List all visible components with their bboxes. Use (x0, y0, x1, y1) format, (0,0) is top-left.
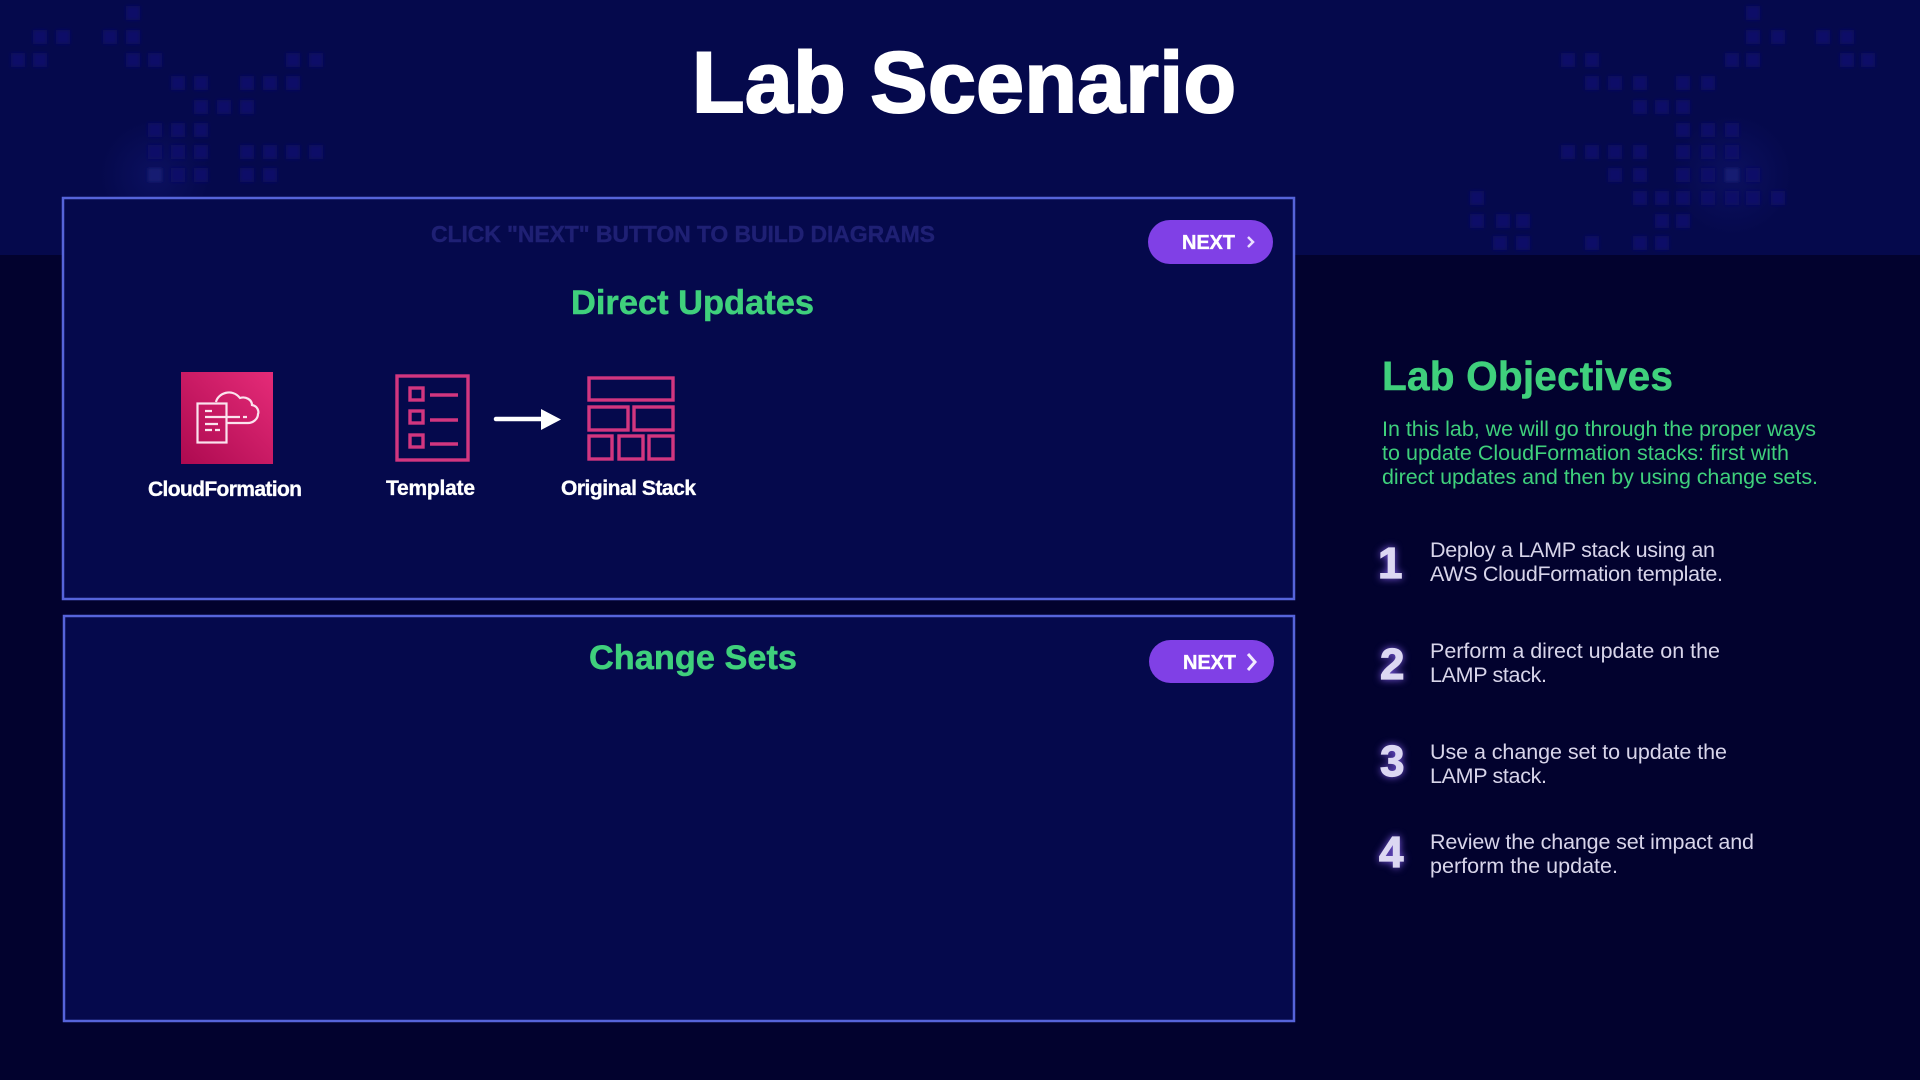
heading: lab objectives: Lab Objectives (1382, 353, 1673, 399)
objective 1: AWS CloudFormation template. (1430, 562, 1723, 586)
objective 4: Review the change set impact and (1430, 830, 1754, 854)
objective 3 (1380, 737, 1727, 788)
objective 2: 2 (1380, 640, 1404, 689)
heading: direct updates: Direct Updates (571, 284, 814, 322)
intro text: to update CloudFormation stacks: first with (1382, 441, 1789, 465)
instruction text: CLICK "NEXT" BUTTON TO BUILD DIAGRAMS (431, 221, 935, 247)
arrow (496, 409, 561, 430)
panel: change sets (64, 616, 1294, 1021)
panel: direct updates (63, 198, 1294, 599)
objective 3: LAMP stack. (1430, 764, 1547, 788)
objective 4: perform the update. (1430, 854, 1618, 878)
header band (0, 0, 1920, 255)
title: Lab Scenario (692, 35, 1236, 131)
objective 3: Use a change set to update the (1430, 740, 1727, 764)
label: cloudformation: CloudFormation (148, 478, 302, 501)
icon: template (397, 376, 468, 460)
icon: cloudformation (181, 372, 273, 464)
objective 1: 1 (1378, 539, 1402, 588)
objective 2: Perform a direct update on the (1430, 639, 1720, 663)
label: template: Template (386, 477, 475, 500)
panel: lab objectives (1378, 353, 1818, 878)
objective 4: 4 (1379, 828, 1404, 877)
objective 4 (1379, 828, 1754, 878)
objective 2 (1380, 639, 1720, 689)
heading: change sets: Change Sets (589, 639, 797, 677)
intro text (1382, 417, 1818, 489)
icon: original stack (589, 378, 673, 459)
objective 3: 3 (1380, 737, 1404, 786)
button: next: NEXT (1182, 232, 1235, 254)
button: next (1149, 640, 1274, 683)
objective 2: LAMP stack. (1430, 663, 1547, 687)
button: next (1148, 220, 1273, 264)
intro text: In this lab, we will go through the proper ways (1382, 417, 1816, 441)
label: original stack: Original Stack (561, 477, 696, 500)
objective 1: Deploy a LAMP stack using an (1430, 538, 1715, 562)
intro text: direct updates and then by using change sets. (1382, 465, 1818, 489)
button: next: NEXT (1183, 652, 1236, 674)
objective 1 (1378, 538, 1723, 588)
